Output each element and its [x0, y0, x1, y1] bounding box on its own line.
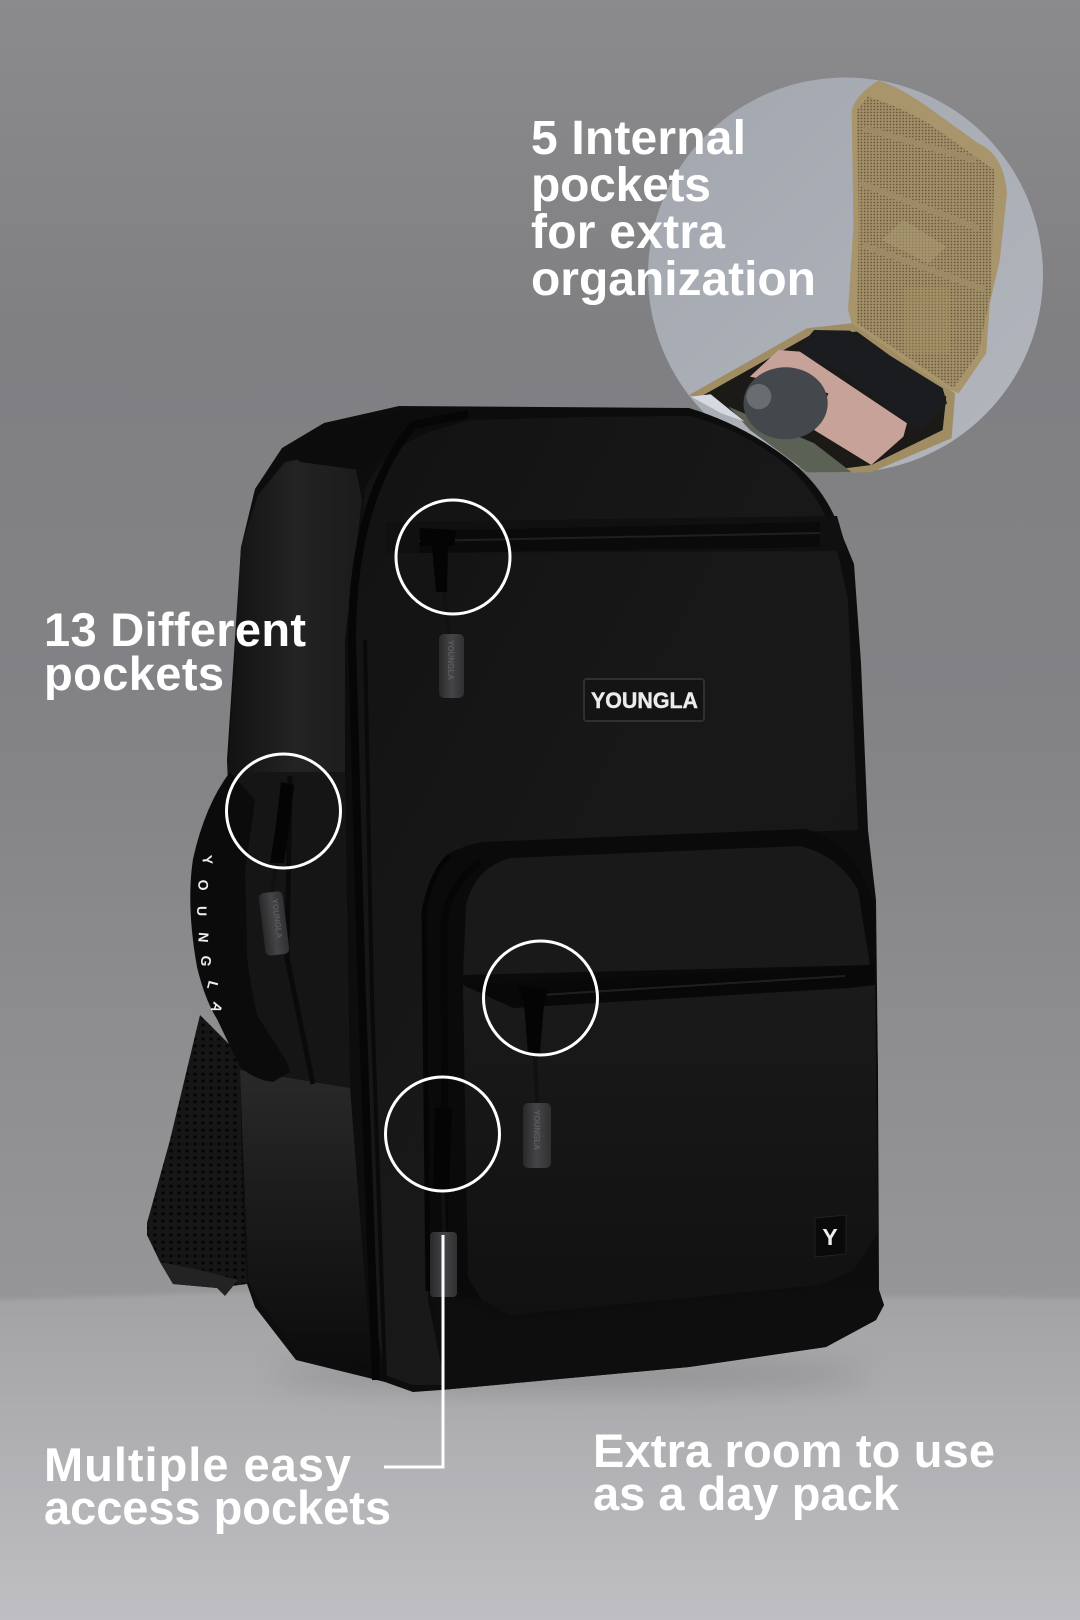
inset circle	[648, 78, 1043, 472]
pull embossed labels	[270, 640, 541, 1150]
cords and sliders	[270, 528, 548, 1190]
pull upper	[439, 634, 464, 698]
massage ball	[743, 367, 828, 439]
lid zips	[861, 128, 986, 290]
pocket zip band	[424, 856, 450, 1291]
slider pocket	[518, 985, 548, 1053]
handle lettering: U	[194, 906, 210, 916]
inset: open bag interior	[648, 78, 1043, 472]
zipper pulls	[258, 634, 551, 1297]
black shirt	[800, 330, 947, 430]
heading: internal pockets: pockets	[531, 159, 711, 212]
heading: internal pockets: 5 Internal	[531, 112, 746, 165]
handle lettering: N	[195, 932, 212, 943]
pull pocket	[523, 1103, 551, 1168]
heading: day pack: as a day pack	[593, 1467, 900, 1520]
mesh shoulder strap	[147, 1015, 247, 1288]
bottom panel	[428, 1285, 884, 1390]
corner logo tag	[815, 1215, 846, 1257]
pull embossed labels: YOUNGLA	[446, 640, 455, 680]
handle lettering: A	[208, 1000, 226, 1015]
brand badge	[584, 679, 704, 721]
heading: different pockets: 13 Different	[44, 603, 306, 656]
heading: day pack	[593, 1424, 995, 1520]
logo mark: Y	[822, 1224, 838, 1250]
pull side	[258, 891, 290, 956]
badge plate	[584, 679, 704, 721]
logo square	[815, 1215, 846, 1257]
callout circle: pocket zip	[484, 941, 598, 1055]
badge text: YOUNGLA	[591, 688, 698, 713]
lower side panel	[240, 1070, 372, 1372]
strap buckle	[160, 1262, 238, 1296]
handle lettering: L	[204, 979, 222, 992]
slider side	[270, 782, 294, 863]
handle lettering: Y	[199, 854, 216, 866]
backpack	[147, 406, 884, 1392]
middle side panel	[228, 772, 350, 1088]
side handle	[190, 772, 290, 1082]
pocket zipper	[463, 965, 875, 1008]
upper side panel	[228, 450, 362, 772]
white clothing	[691, 394, 745, 422]
heading: internal pockets: organization	[531, 253, 816, 306]
heading: day pack: Extra room to use	[593, 1424, 995, 1477]
pull embossed labels: YOUNGLA	[270, 898, 284, 939]
handle lettering: G	[197, 955, 215, 968]
upper zipper	[386, 516, 847, 553]
side pocket zipper	[287, 776, 313, 1084]
callout circle: front zip	[386, 1077, 500, 1191]
floor shadow	[270, 1359, 870, 1391]
heading: different pockets	[44, 603, 306, 700]
callout circle: side zip	[226, 754, 340, 868]
green clothing	[728, 407, 852, 472]
main zip seam	[352, 414, 468, 1380]
bag tray	[689, 323, 955, 472]
heading: different pockets: pockets	[44, 647, 224, 700]
lid frame	[848, 81, 1007, 393]
arrow: connector line to easy access label	[384, 1235, 443, 1467]
pink clothing	[750, 350, 907, 465]
pocket flap lower	[463, 968, 878, 1315]
inset bag photo	[689, 81, 1007, 472]
handle lettering: O	[195, 879, 212, 891]
handle lettering	[194, 854, 226, 1015]
heading: easy access pockets: access pockets	[44, 1481, 391, 1534]
slider front	[433, 1108, 452, 1190]
callout circle: top zip	[396, 500, 510, 614]
heading: easy access pockets: Multiple easy	[44, 1438, 351, 1491]
lower pocket	[424, 829, 878, 1315]
heading: easy access pockets	[44, 1438, 391, 1534]
backpack silhouette	[227, 406, 884, 1392]
slider upper	[420, 528, 456, 592]
heading: internal pockets	[531, 112, 816, 306]
front panel	[350, 416, 858, 1385]
pocket flap upper	[463, 846, 870, 975]
floor	[0, 1292, 1080, 1620]
heading: internal pockets: for extra	[531, 206, 725, 259]
pull embossed labels: YOUNGLA	[532, 1110, 541, 1150]
pull front	[430, 1232, 457, 1297]
top band	[290, 410, 700, 470]
lid mesh	[857, 97, 994, 388]
